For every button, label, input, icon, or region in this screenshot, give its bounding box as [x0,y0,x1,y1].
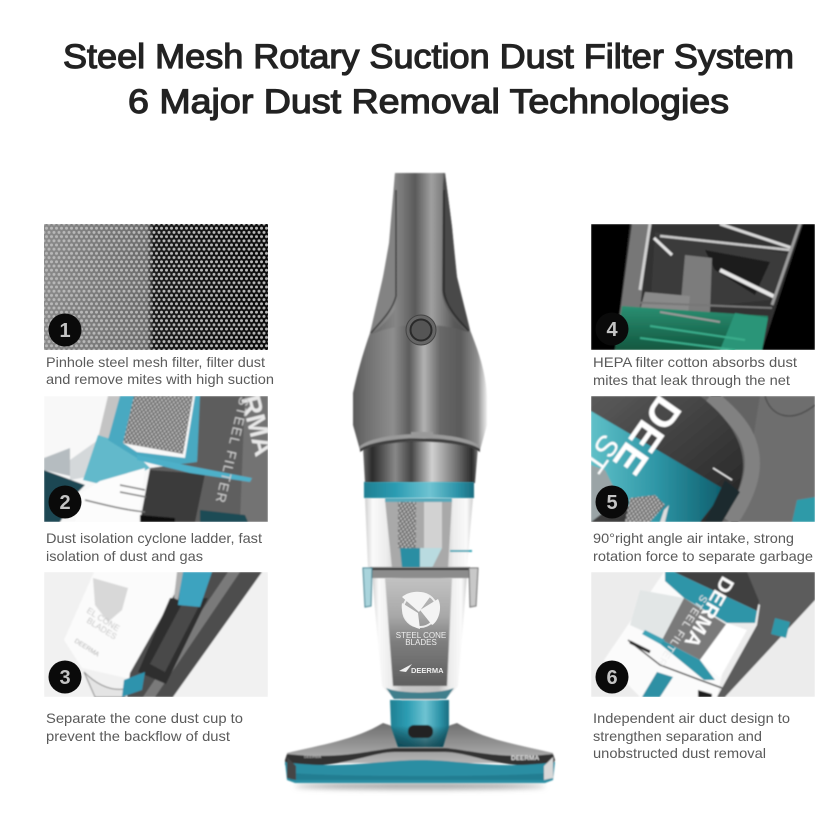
vacuum cleaner product [285,173,555,789]
collar [363,440,478,483]
image: air duct [591,572,815,697]
image: HEPA filter [591,224,815,350]
badge 6 [596,660,628,694]
image: air duct: DERMA [680,572,738,651]
caption 2: Dust isolation cyclone ladder, fast [46,530,262,546]
panel 1: steel mesh [44,224,274,387]
badge 5: 5 [606,492,618,514]
image: pinhole mesh [44,224,268,350]
image: air intake: DEE [604,388,690,483]
blue ring [364,482,474,498]
caption 1 [46,354,274,387]
badge 1 [48,314,82,346]
caption 3: Separate the cone dust cup to [46,710,243,726]
badge 4: 4 [606,319,618,341]
caption 5: 90°right angle air intake, strong [593,530,794,546]
caption 5: rotation force to separate garbage [593,548,813,564]
caption 6: Independent air duct design to [593,710,790,726]
image: air duct: STEEL FILTER [654,592,710,669]
cup clamp band and clips [363,567,478,607]
steel cone logo [396,592,446,675]
caption 1: and remove mites with high suction [46,371,274,387]
badge 2 [48,486,82,518]
image: air intake: ST [576,428,625,478]
image: cone dust cup: EL CONE [85,605,122,633]
title: 6 Major Dust Removal Technologies [128,83,729,121]
steel cone logo: STEEL CONE [396,631,446,640]
caption 5 [593,530,813,564]
caption 4 [593,354,797,388]
floor brush head [285,723,555,783]
caption 3 [46,710,243,744]
steel cone logo: BLADES [405,638,437,647]
badge 1: 1 [59,320,71,342]
upper dust cup and filter [365,498,473,568]
motor body [353,173,487,452]
title: Steel Mesh Rotary Suction Dust Filter System [63,38,794,76]
image: cone dust cup: BLADES [85,615,119,642]
panel 5: air intake [591,396,815,564]
image: air intake [591,396,815,522]
caption 2: isolation of dust and gas [46,548,203,564]
image: cone dust cup: DEERMA [73,638,101,659]
caption 1: Pinhole steel mesh filter, filter dust [46,354,265,370]
lower dust cup [372,576,467,700]
caption 3: prevent the backflow of dust [46,728,230,744]
caption 6: unobstructed dust removal [593,745,766,761]
floor shadow [295,783,545,789]
badge 3: 3 [59,667,71,689]
steel cone logo: DEERMA [411,666,444,675]
badge 4 [596,312,628,346]
panel 4: HEPA filter [591,224,815,388]
badge 2: 2 [59,492,71,514]
badge 3 [48,660,82,694]
panel 2: cyclone ladder [44,392,279,564]
power button [406,315,436,345]
panel 3: cone dust cup [44,572,268,744]
title [63,38,794,121]
floor brush head: DEERMA [511,755,539,762]
badge 6: 6 [606,667,618,689]
caption 6: strengthen separation and [593,728,762,744]
floor brush head: DEERMA [304,754,321,759]
caption 4: HEPA filter cotton absorbs dust [593,354,797,370]
neck joint [390,700,449,747]
image: cone dust cup [44,572,268,697]
image: cyclone ladder: STEEL FILTER [212,395,252,505]
caption 2 [46,530,262,564]
caption 4: mites that leak through the net [593,372,790,388]
panel 6: air duct [591,572,815,761]
badge 5 [596,486,628,518]
image: cyclone ladder: RMA [235,392,279,459]
caption 6 [593,710,790,761]
image: cyclone ladder [44,392,279,522]
